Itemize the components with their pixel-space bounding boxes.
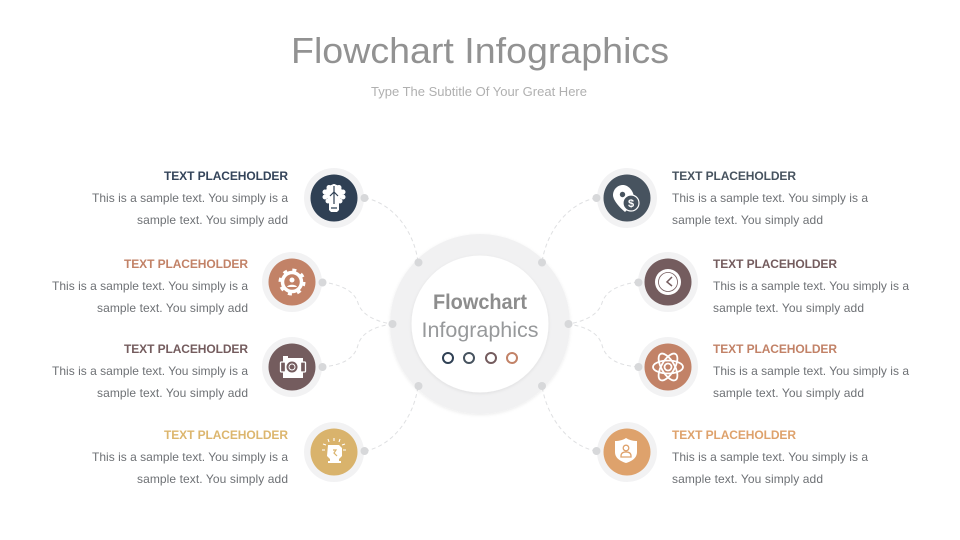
- hub and connector dots: [318, 194, 642, 455]
- icon: brain: [304, 168, 364, 228]
- body text: sample text. You simply add: [713, 301, 864, 315]
- body text: sample text. You simply add: [713, 386, 864, 400]
- hub colour rings: [443, 353, 517, 363]
- body text: This is a sample text. You simply is a: [92, 450, 288, 464]
- body text: This is a sample text. You simply is a: [672, 450, 868, 464]
- item: left 2: [52, 252, 322, 315]
- body text: sample text. You simply add: [137, 472, 288, 486]
- body text: This is a sample text. You simply is a: [713, 364, 909, 378]
- icon: map pin with dollar: [597, 168, 657, 228]
- icon: gear with person: [262, 252, 322, 312]
- icon: clock: [638, 252, 698, 312]
- item: right 4: [597, 422, 868, 486]
- item: left 1: [92, 168, 364, 228]
- heading: TEXT PLACEHOLDER: [164, 428, 288, 442]
- body text: This is a sample text. You simply is a: [92, 191, 288, 205]
- heading: TEXT PLACEHOLDER: [672, 428, 796, 442]
- body text: sample text. You simply add: [672, 472, 823, 486]
- icon: raised fist: [304, 422, 364, 482]
- heading: TEXT PLACEHOLDER: [164, 169, 288, 183]
- body text: sample text. You simply add: [97, 301, 248, 315]
- heading: TEXT PLACEHOLDER: [713, 257, 837, 271]
- title: Flowchart Infographics: [291, 30, 669, 71]
- body text: sample text. You simply add: [672, 213, 823, 227]
- hub heading: Flowchart: [433, 291, 527, 314]
- heading: TEXT PLACEHOLDER: [124, 257, 248, 271]
- icon: shield with person: [597, 422, 657, 482]
- body text: This is a sample text. You simply is a: [52, 364, 248, 378]
- body text: This is a sample text. You simply is a: [52, 279, 248, 293]
- item: left 4: [92, 422, 364, 486]
- icon: atom: [638, 337, 698, 397]
- body text: sample text. You simply add: [137, 213, 288, 227]
- subtitle: Type The Subtitle Of Your Great Here: [371, 84, 587, 99]
- body text: This is a sample text. You simply is a: [713, 279, 909, 293]
- heading: TEXT PLACEHOLDER: [672, 169, 796, 183]
- item: right 1: [597, 168, 868, 228]
- central hub: [390, 234, 570, 414]
- body text: This is a sample text. You simply is a: [672, 191, 868, 205]
- heading: TEXT PLACEHOLDER: [124, 342, 248, 356]
- icon: map pin with dollar: $: [628, 198, 634, 210]
- icon: camera: [262, 337, 322, 397]
- hub subheading: Infographics: [422, 319, 538, 342]
- heading: TEXT PLACEHOLDER: [713, 342, 837, 356]
- item: right 2: [638, 252, 909, 315]
- item: right 3: [638, 337, 909, 400]
- connectors: [322, 198, 638, 451]
- body text: sample text. You simply add: [97, 386, 248, 400]
- item: left 3: [52, 337, 322, 400]
